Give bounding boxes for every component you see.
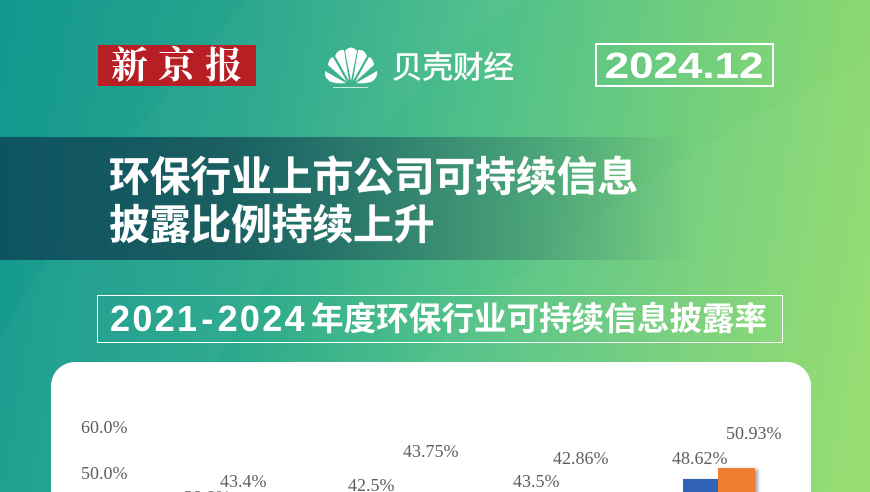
bar chart [81, 417, 782, 492]
brand name: 贝壳财经 [392, 51, 514, 85]
logo: 新京报: 新京报 [111, 46, 252, 86]
value label: 50.93% [726, 423, 782, 443]
title: 披露比例持续上升 [109, 202, 435, 248]
title: 环保行业上市公司可持续信息 [109, 154, 638, 200]
panel: chart [51, 362, 811, 492]
axis label 60%: 60.0% [81, 417, 128, 437]
subtitle box: 2021-2024 [110, 298, 307, 339]
title [109, 154, 638, 248]
value label: 43.4% [220, 471, 266, 491]
value label: 48.62% [672, 448, 728, 468]
bar 2024 blue [683, 479, 718, 492]
icon: shell [324, 48, 378, 88]
value label: 43.75% [403, 441, 458, 461]
bar 2024 orange [718, 468, 755, 492]
value label: 43.5% [513, 471, 560, 491]
banner: headline [0, 137, 870, 260]
subtitle box [97, 295, 783, 343]
value label: 42.86% [553, 448, 608, 468]
subtitle box: 年度环保行业可持续信息披露率 [311, 300, 767, 337]
logo: 贝壳财经 [324, 48, 514, 88]
date box: 2024.12 [605, 45, 764, 86]
axis label 50%: 50.0% [81, 463, 128, 483]
